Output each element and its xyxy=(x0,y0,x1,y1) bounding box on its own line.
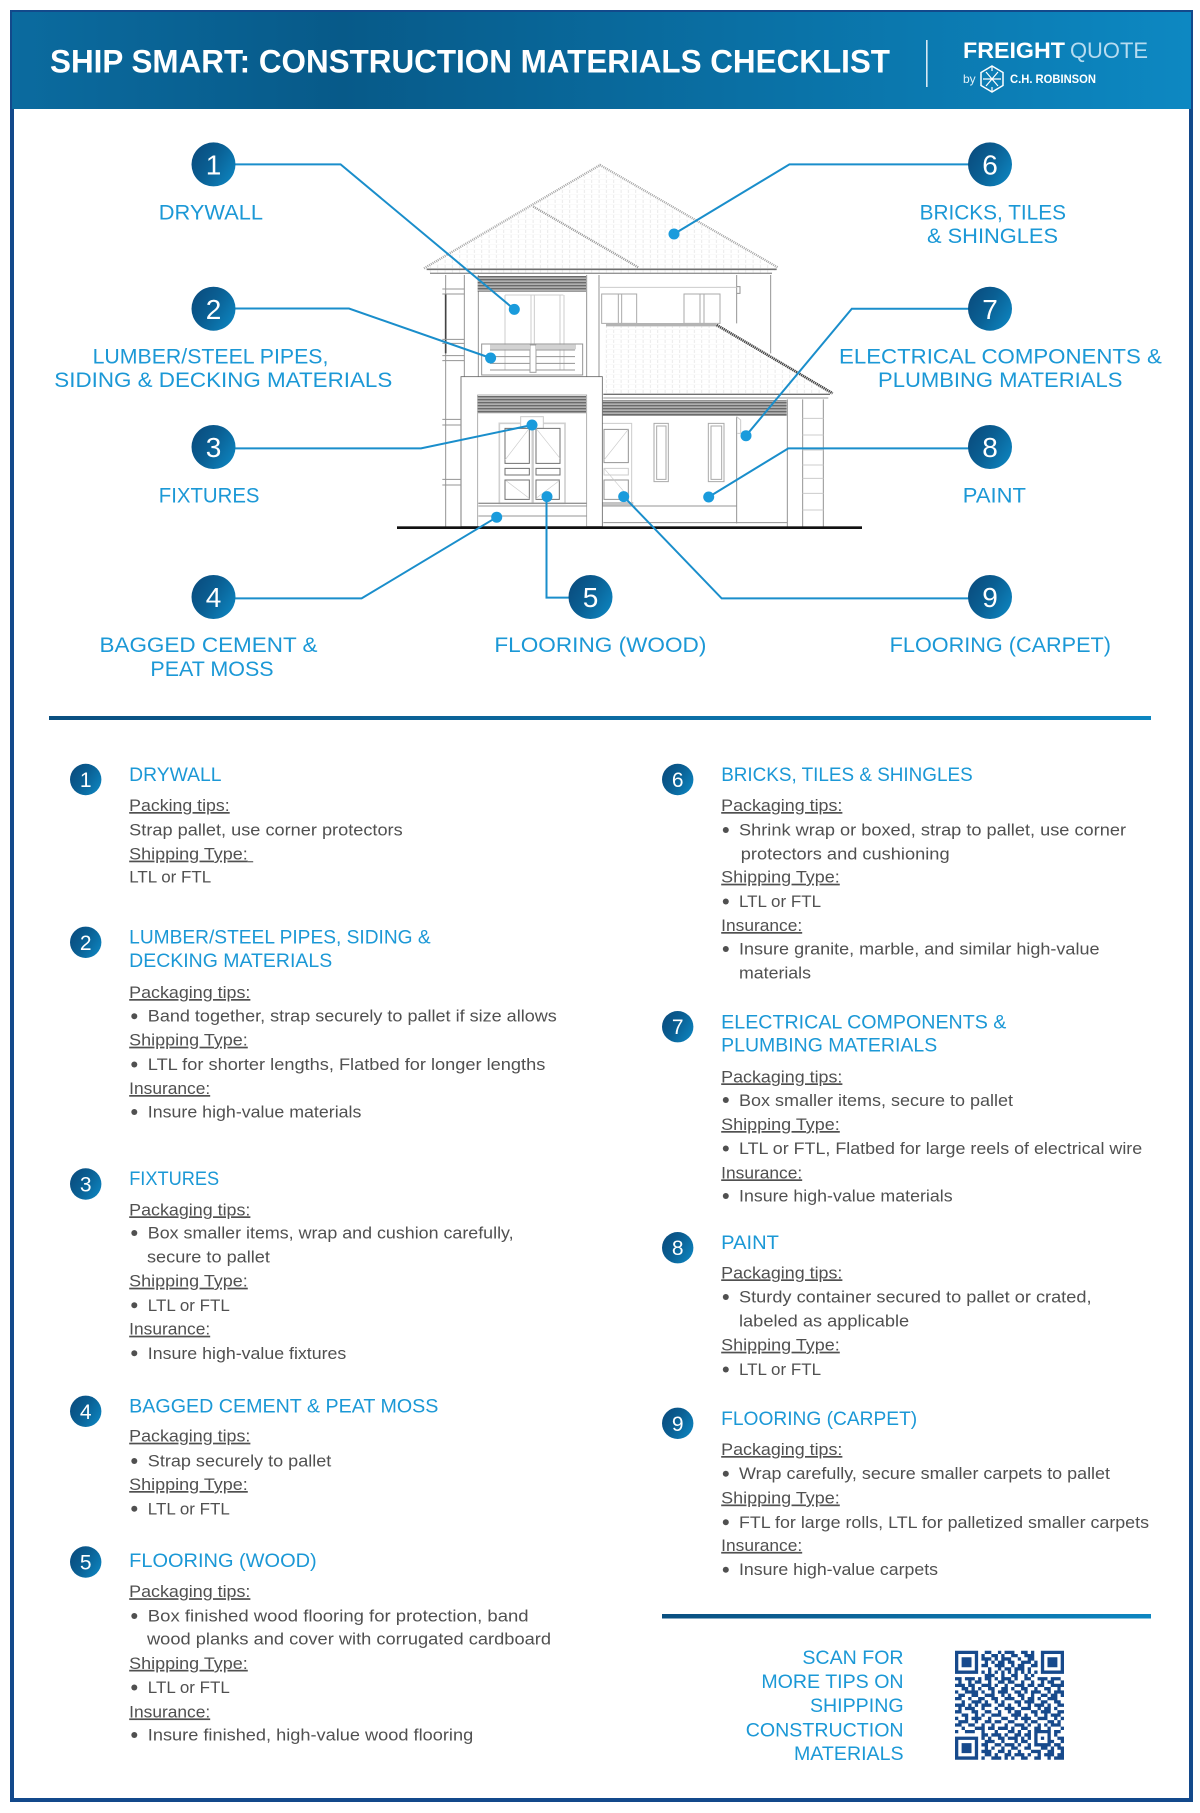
logo: Freightquote by C.H. Robinson: FREIGHT xyxy=(963,38,1066,63)
callout 4: bagged cement xyxy=(100,512,502,681)
item 5: flooring wood: Insure finished, high-value wood flooring xyxy=(148,1726,473,1744)
item 6: bricks: Insurance: xyxy=(721,916,802,935)
item 1: drywall: DRYWALL xyxy=(129,765,222,786)
upper storey xyxy=(442,275,771,527)
item 6: bricks: Shrink wrap or boxed, strap to pallet, use corner xyxy=(739,820,1126,839)
item 9: flooring carpet xyxy=(662,1408,1149,1579)
item 1: drywall: Shipping Type: xyxy=(129,845,248,864)
item 5: flooring wood: wood planks and cover with corrugated cardboard xyxy=(146,1630,551,1649)
item 7: electrical: 7 xyxy=(672,1016,684,1039)
item 6: bricks: BRICKS, TILES & SHINGLES xyxy=(721,765,973,786)
callout 4: bagged cement: 4 xyxy=(206,582,221,613)
scan call to action: CONSTRUCTION xyxy=(746,1720,904,1742)
item 4: bagged cement: LTL or FTL xyxy=(148,1499,230,1518)
item 9: flooring carpet: Packaging tips: xyxy=(721,1440,842,1459)
item 7: electrical: ELECTRICAL COMPONENTS & xyxy=(721,1012,1007,1033)
item 2: lumber: Packaging tips: xyxy=(129,983,250,1002)
item 1: drywall: 1 xyxy=(80,769,92,792)
logo: Freightquote by C.H. Robinson xyxy=(926,38,1148,92)
item 3: fixtures: FIXTURES xyxy=(129,1169,219,1190)
item 2: lumber: Insurance: xyxy=(129,1079,210,1098)
item 5: flooring wood: Box finished wood flooring for protection, band xyxy=(148,1606,529,1625)
QR code xyxy=(955,1651,1064,1760)
item 9: flooring carpet: 9 xyxy=(672,1413,684,1436)
callout 2: lumber: 2 xyxy=(206,294,221,325)
item 9: flooring carpet: Insurance: xyxy=(721,1536,802,1555)
callout 7: electrical: ELECTRICAL COMPONENTS & xyxy=(839,344,1162,368)
item 2: lumber: LUMBER/STEEL PIPES, SIDING & xyxy=(129,927,431,948)
callout 7: electrical: PLUMBING MATERIALS xyxy=(878,368,1122,392)
title: SHIP SMART: CONSTRUCTION MATERIALS CHECKLIST xyxy=(50,44,890,80)
callout 5: flooring wood: FLOORING (WOOD) xyxy=(494,633,706,657)
item 4: bagged cement xyxy=(70,1396,438,1518)
item 4: bagged cement: Packaging tips: xyxy=(129,1427,250,1446)
item 9: flooring carpet: Insure high-value carpets xyxy=(739,1560,938,1579)
item 4: bagged cement: Shipping Type: xyxy=(129,1475,248,1494)
item 9: flooring carpet: FTL for large rolls, LTL for palletized smaller carpets xyxy=(739,1513,1149,1532)
item 5: flooring wood: Shipping Type: xyxy=(129,1654,248,1673)
item 3: fixtures: Box smaller items, wrap and cushion carefully, xyxy=(148,1224,514,1243)
header banner xyxy=(12,12,1191,109)
item 1: drywall: Strap pallet, use corner protectors xyxy=(129,820,403,839)
logo: Freightquote by C.H. Robinson: C.H. ROBINSON xyxy=(1010,72,1096,86)
callout 2: lumber xyxy=(54,287,496,392)
callout 2: lumber: SIDING & DECKING MATERIALS xyxy=(54,368,392,392)
item 1: drywall: LTL or FTL xyxy=(129,868,211,887)
item 8: paint: PAINT xyxy=(721,1233,779,1254)
item 8: paint xyxy=(662,1232,1092,1379)
callout 4: bagged cement: BAGGED CEMENT & xyxy=(100,633,318,657)
scan call to action: MORE TIPS ON xyxy=(761,1671,904,1693)
item 9: flooring carpet: FLOORING (CARPET) xyxy=(721,1409,917,1430)
item 3: fixtures xyxy=(70,1168,514,1363)
item 9: flooring carpet: Wrap carefully, secure smaller carpets to pallet xyxy=(739,1464,1110,1483)
callout 7: electrical xyxy=(740,287,1162,441)
callout 6: bricks: & SHINGLES xyxy=(927,224,1058,248)
callout 8: paint: 8 xyxy=(982,432,998,463)
item 2: lumber: DECKING MATERIALS xyxy=(129,951,332,972)
item 3: fixtures: secure to pallet xyxy=(147,1248,270,1267)
item 5: flooring wood: Insurance: xyxy=(129,1702,210,1721)
portico and front doors xyxy=(442,377,602,527)
item 7: electrical: Insure high-value materials xyxy=(739,1187,953,1206)
logo: Freightquote by C.H. Robinson: QUOTE xyxy=(1070,38,1148,63)
item 4: bagged cement: BAGGED CEMENT & PEAT MOSS xyxy=(129,1396,438,1417)
lower roof xyxy=(603,323,833,398)
callout 3: fixtures: 3 xyxy=(206,432,221,463)
section divider xyxy=(49,716,1151,720)
callout 4: bagged cement: PEAT MOSS xyxy=(150,657,274,681)
item 6: bricks: LTL or FTL xyxy=(739,892,821,911)
item 2: lumber: LTL for shorter lengths, Flatbed for longer lengths xyxy=(148,1055,545,1074)
item 3: fixtures: Packaging tips: xyxy=(129,1200,250,1219)
callout 7: electrical: 7 xyxy=(982,294,998,325)
item 7: electrical: Insurance: xyxy=(721,1163,802,1182)
callout 9: flooring carpet: 9 xyxy=(982,582,998,613)
item 6: bricks: 6 xyxy=(672,769,684,792)
callout 6: bricks xyxy=(668,142,1066,248)
callout 3: fixtures: FIXTURES xyxy=(159,484,260,508)
item 8: paint: labeled as applicable xyxy=(739,1312,909,1331)
item 8: paint: LTL or FTL xyxy=(739,1360,821,1379)
item 3: fixtures: Insure high-value fixtures xyxy=(148,1344,346,1363)
item 9: flooring carpet: Shipping Type: xyxy=(721,1488,840,1508)
item 3: fixtures: Shipping Type: xyxy=(129,1272,248,1291)
item 7: electrical: Packaging tips: xyxy=(721,1067,842,1086)
item 3: fixtures: LTL or FTL xyxy=(148,1296,230,1315)
callout 8: paint xyxy=(703,425,1026,508)
item 3: fixtures: Insurance: xyxy=(129,1320,210,1339)
item 4: bagged cement: Strap securely to pallet xyxy=(148,1452,332,1471)
item 5: flooring wood xyxy=(70,1546,551,1744)
callout 5: flooring wood: 5 xyxy=(583,582,598,613)
item 8: paint: Sturdy container secured to pallet or crated, xyxy=(739,1288,1092,1307)
callout 6: bricks: 6 xyxy=(982,150,998,180)
item 7: electrical: Box smaller items, secure to pallet xyxy=(739,1091,1013,1110)
item 8: paint: 8 xyxy=(672,1237,684,1260)
callout 9: flooring carpet: FLOORING (CARPET) xyxy=(890,633,1111,657)
item 2: lumber: Insure high-value materials xyxy=(148,1103,361,1122)
item 6: bricks: Insure granite, marble, and similar high-value xyxy=(739,939,1100,958)
item 7: electrical xyxy=(662,1011,1142,1206)
item 2: lumber xyxy=(70,927,557,1122)
item 8: paint: Packaging tips: xyxy=(721,1263,842,1282)
ground line xyxy=(397,526,862,529)
scan call to action xyxy=(746,1647,904,1765)
item 1: drywall xyxy=(70,764,403,887)
item 5: flooring wood: Packaging tips: xyxy=(129,1582,250,1601)
item 7: electrical: Shipping Type: xyxy=(721,1115,840,1134)
callout 9: flooring carpet xyxy=(618,491,1111,657)
house elevation drawing xyxy=(397,165,862,529)
item 6: bricks: materials xyxy=(739,964,811,983)
item 1: drywall: Packing tips: xyxy=(129,796,230,815)
callout 6: bricks: BRICKS, TILES xyxy=(920,200,1066,224)
item 2: lumber: Shipping Type: xyxy=(129,1031,248,1050)
callout 5: flooring wood xyxy=(494,491,706,657)
item 2: lumber: Band together, strap securely to pallet if size allows xyxy=(148,1007,557,1026)
item 2: lumber: 2 xyxy=(80,932,92,955)
callout 8: paint: PAINT xyxy=(963,484,1026,508)
item 6: bricks xyxy=(662,764,1126,983)
callout 1: drywall xyxy=(159,142,520,315)
item 6: bricks: Shipping Type: xyxy=(721,868,840,887)
callout 2: lumber: LUMBER/STEEL PIPES, xyxy=(93,344,328,368)
item 7: electrical: LTL or FTL, Flatbed for large reels of electrical wire xyxy=(739,1139,1142,1158)
item 5: flooring wood: FLOORING (WOOD) xyxy=(129,1551,317,1572)
scan call to action: SHIPPING xyxy=(810,1695,904,1717)
item 6: bricks: Packaging tips: xyxy=(721,796,842,815)
callout 1: drywall: DRYWALL xyxy=(159,200,263,224)
item 7: electrical: PLUMBING MATERIALS xyxy=(721,1036,937,1057)
lower storey right side xyxy=(598,399,823,527)
item 3: fixtures: 3 xyxy=(80,1174,92,1196)
QR section divider xyxy=(662,1614,1151,1618)
scan call to action: MATERIALS xyxy=(794,1743,904,1765)
item 5: flooring wood: 5 xyxy=(80,1552,92,1574)
item 4: bagged cement: 4 xyxy=(80,1401,92,1424)
scan call to action: SCAN FOR xyxy=(802,1647,904,1669)
callout 1: drywall: 1 xyxy=(206,150,221,180)
main roof xyxy=(424,165,778,273)
item 8: paint: Shipping Type: xyxy=(721,1336,840,1355)
item 5: flooring wood: LTL or FTL xyxy=(148,1678,230,1697)
callout 3: fixtures xyxy=(159,420,538,508)
item 6: bricks: protectors and cushioning xyxy=(741,845,950,864)
logo: Freightquote by C.H. Robinson: by xyxy=(963,72,976,86)
